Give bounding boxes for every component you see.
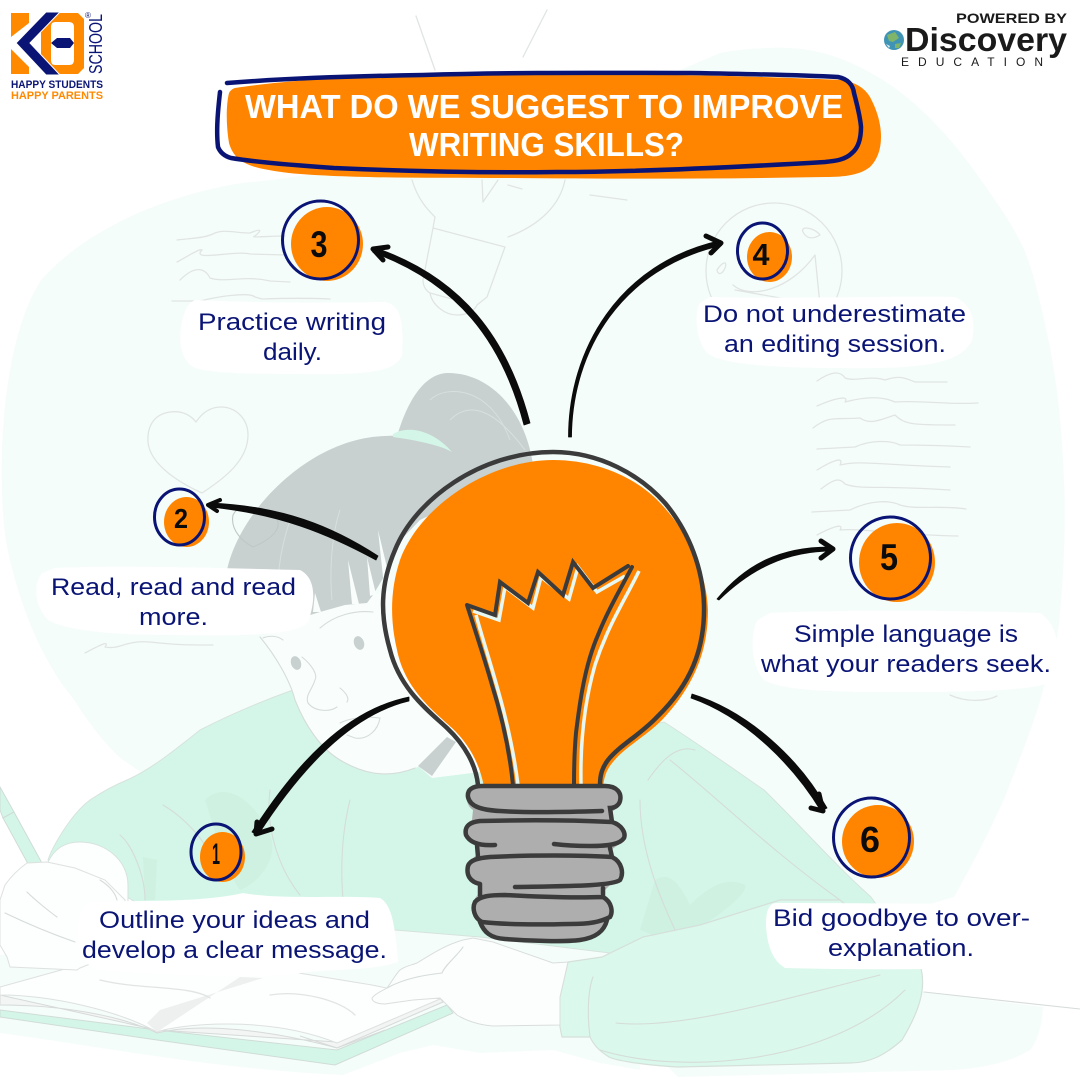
illustration: collar: [418, 735, 482, 778]
text: step 2: [51, 574, 296, 631]
illustration: hair detail lines: [278, 391, 525, 610]
illustration: open notebook: [0, 960, 453, 1065]
bulb: glass outline: [383, 452, 704, 785]
bulb: filament: [467, 562, 632, 785]
bubble: step 4: [697, 297, 973, 368]
title banner: navy outline: [217, 73, 861, 172]
text: step 3: Practice writing: [198, 309, 386, 336]
illustration: white fringe spikes: [313, 530, 390, 612]
badge: step 2: [154, 489, 209, 547]
illustration: girl's ponytail: [398, 373, 533, 500]
badge: step 6: [834, 798, 914, 878]
text: step 5: Simple language is: [794, 621, 1018, 648]
badge: step 3: 3: [310, 224, 328, 265]
arrow: to step 4: [568, 236, 722, 437]
logo: SCHOOL: SCHOOL: [86, 14, 106, 74]
logo: education: EDUCATION: [901, 55, 1043, 69]
illustration: desk line: [924, 992, 1080, 1009]
text: step 6: Bid goodbye to over-: [773, 905, 1030, 932]
illustration: pen: [0, 787, 77, 927]
text: step 6: explanation.: [828, 935, 974, 962]
bubble: step 5: [753, 611, 1058, 692]
arrow: to step 3: [373, 247, 530, 425]
bulb: filament highlight: [473, 567, 639, 785]
logo: powered by: POWERED BY: [956, 10, 1068, 26]
bubble: step 3: [180, 300, 402, 374]
illustration: girl's face: [262, 585, 470, 774]
illustration: faint scribbled text lines, left: [85, 230, 330, 653]
text: step 1: [82, 907, 387, 964]
illustration: faint scribbled text lines, right: [812, 373, 978, 536]
logo: Discovery wordmark: Discovery: [905, 21, 1068, 58]
illustration: writing hand: [0, 862, 125, 970]
arrow: to step 5: [717, 541, 833, 600]
bulb: screw base: [464, 786, 624, 942]
logo: happy students: HAPPY STUDENTS: [11, 79, 103, 91]
title text line 2: WRITING SKILLS?: [409, 126, 684, 163]
text: step 2: more.: [139, 604, 208, 631]
text: step 5: what your readers seek.: [760, 651, 1051, 678]
title text line 1: WHAT DO WE SUGGEST TO IMPROVE: [245, 88, 843, 125]
badge: step 6: 6: [860, 819, 880, 860]
logo: Discovery Education: [884, 10, 1068, 69]
text: step 2: Read, read and read: [51, 574, 296, 601]
illustration: faint smiley circle: [706, 203, 842, 339]
text: step 1: develop a clear message.: [82, 937, 387, 964]
text: step 4: [703, 301, 966, 358]
text: step 4: Do not underestimate: [703, 301, 966, 328]
illustration: faint arcs right: [938, 614, 1008, 700]
central light bulb: [383, 452, 708, 942]
badge: step 1: [191, 824, 245, 882]
text: step 6: [773, 905, 1030, 962]
title banner: orange fill: [227, 74, 881, 179]
illustration: arm detail lines: [588, 975, 905, 1062]
illustration: girl's resting arm: [559, 900, 923, 1067]
logo: registered mark: ®: [85, 11, 91, 20]
illustration: sleeve cuff: [48, 842, 128, 910]
badge: step 3: [282, 201, 363, 281]
logo: KD School: [11, 11, 106, 102]
text: step 3: [198, 309, 386, 366]
arrow: to step 2: [208, 500, 378, 560]
logo: globe icon: [884, 30, 904, 50]
badge: step 5: 5: [880, 537, 898, 578]
background: pale desk area: [0, 930, 640, 1075]
bubble: step 1: [78, 893, 398, 976]
badge: step 4: 4: [752, 237, 770, 272]
illustration: hair tie: [393, 430, 452, 452]
badge: step 2: 2: [174, 503, 188, 534]
illustration: hair lower strip: [418, 737, 456, 776]
text: step 3: daily.: [263, 339, 322, 366]
arrow: to step 6: [691, 694, 827, 811]
illustration: faint heart small: [233, 507, 278, 547]
illustration: eyes: [289, 635, 366, 671]
badge: step 5: [850, 517, 935, 602]
arrow: to step 1: [252, 697, 409, 835]
bubble: step 6: [766, 903, 1045, 969]
logo: happy parents: HAPPY PARENTS: [11, 90, 103, 102]
badge: step 4: [738, 223, 792, 282]
illustration: other hand: [372, 938, 568, 1026]
logo mark: navy hex: [51, 38, 74, 48]
illustration: sweater folds: [120, 749, 840, 942]
logo mark: orange K and O: [11, 13, 29, 74]
illustration: face detail lines: [260, 612, 415, 774]
illustration: girl's hair: [227, 436, 533, 622]
logo mark: navy chevron: [16, 12, 60, 75]
illustration: faint heart large: [148, 407, 248, 493]
text: step 5: [760, 621, 1051, 678]
bulb: orange fill: [392, 460, 708, 787]
badge: step 1: 1: [212, 838, 220, 871]
title banner: [217, 73, 881, 179]
bubble: step 2: [36, 567, 313, 635]
illustration: girl's sweater: [48, 690, 921, 985]
illustration: faint background light bulb: [412, 10, 627, 315]
text: step 4: an editing session.: [724, 331, 946, 358]
text: step 1: Outline your ideas and: [99, 907, 370, 934]
